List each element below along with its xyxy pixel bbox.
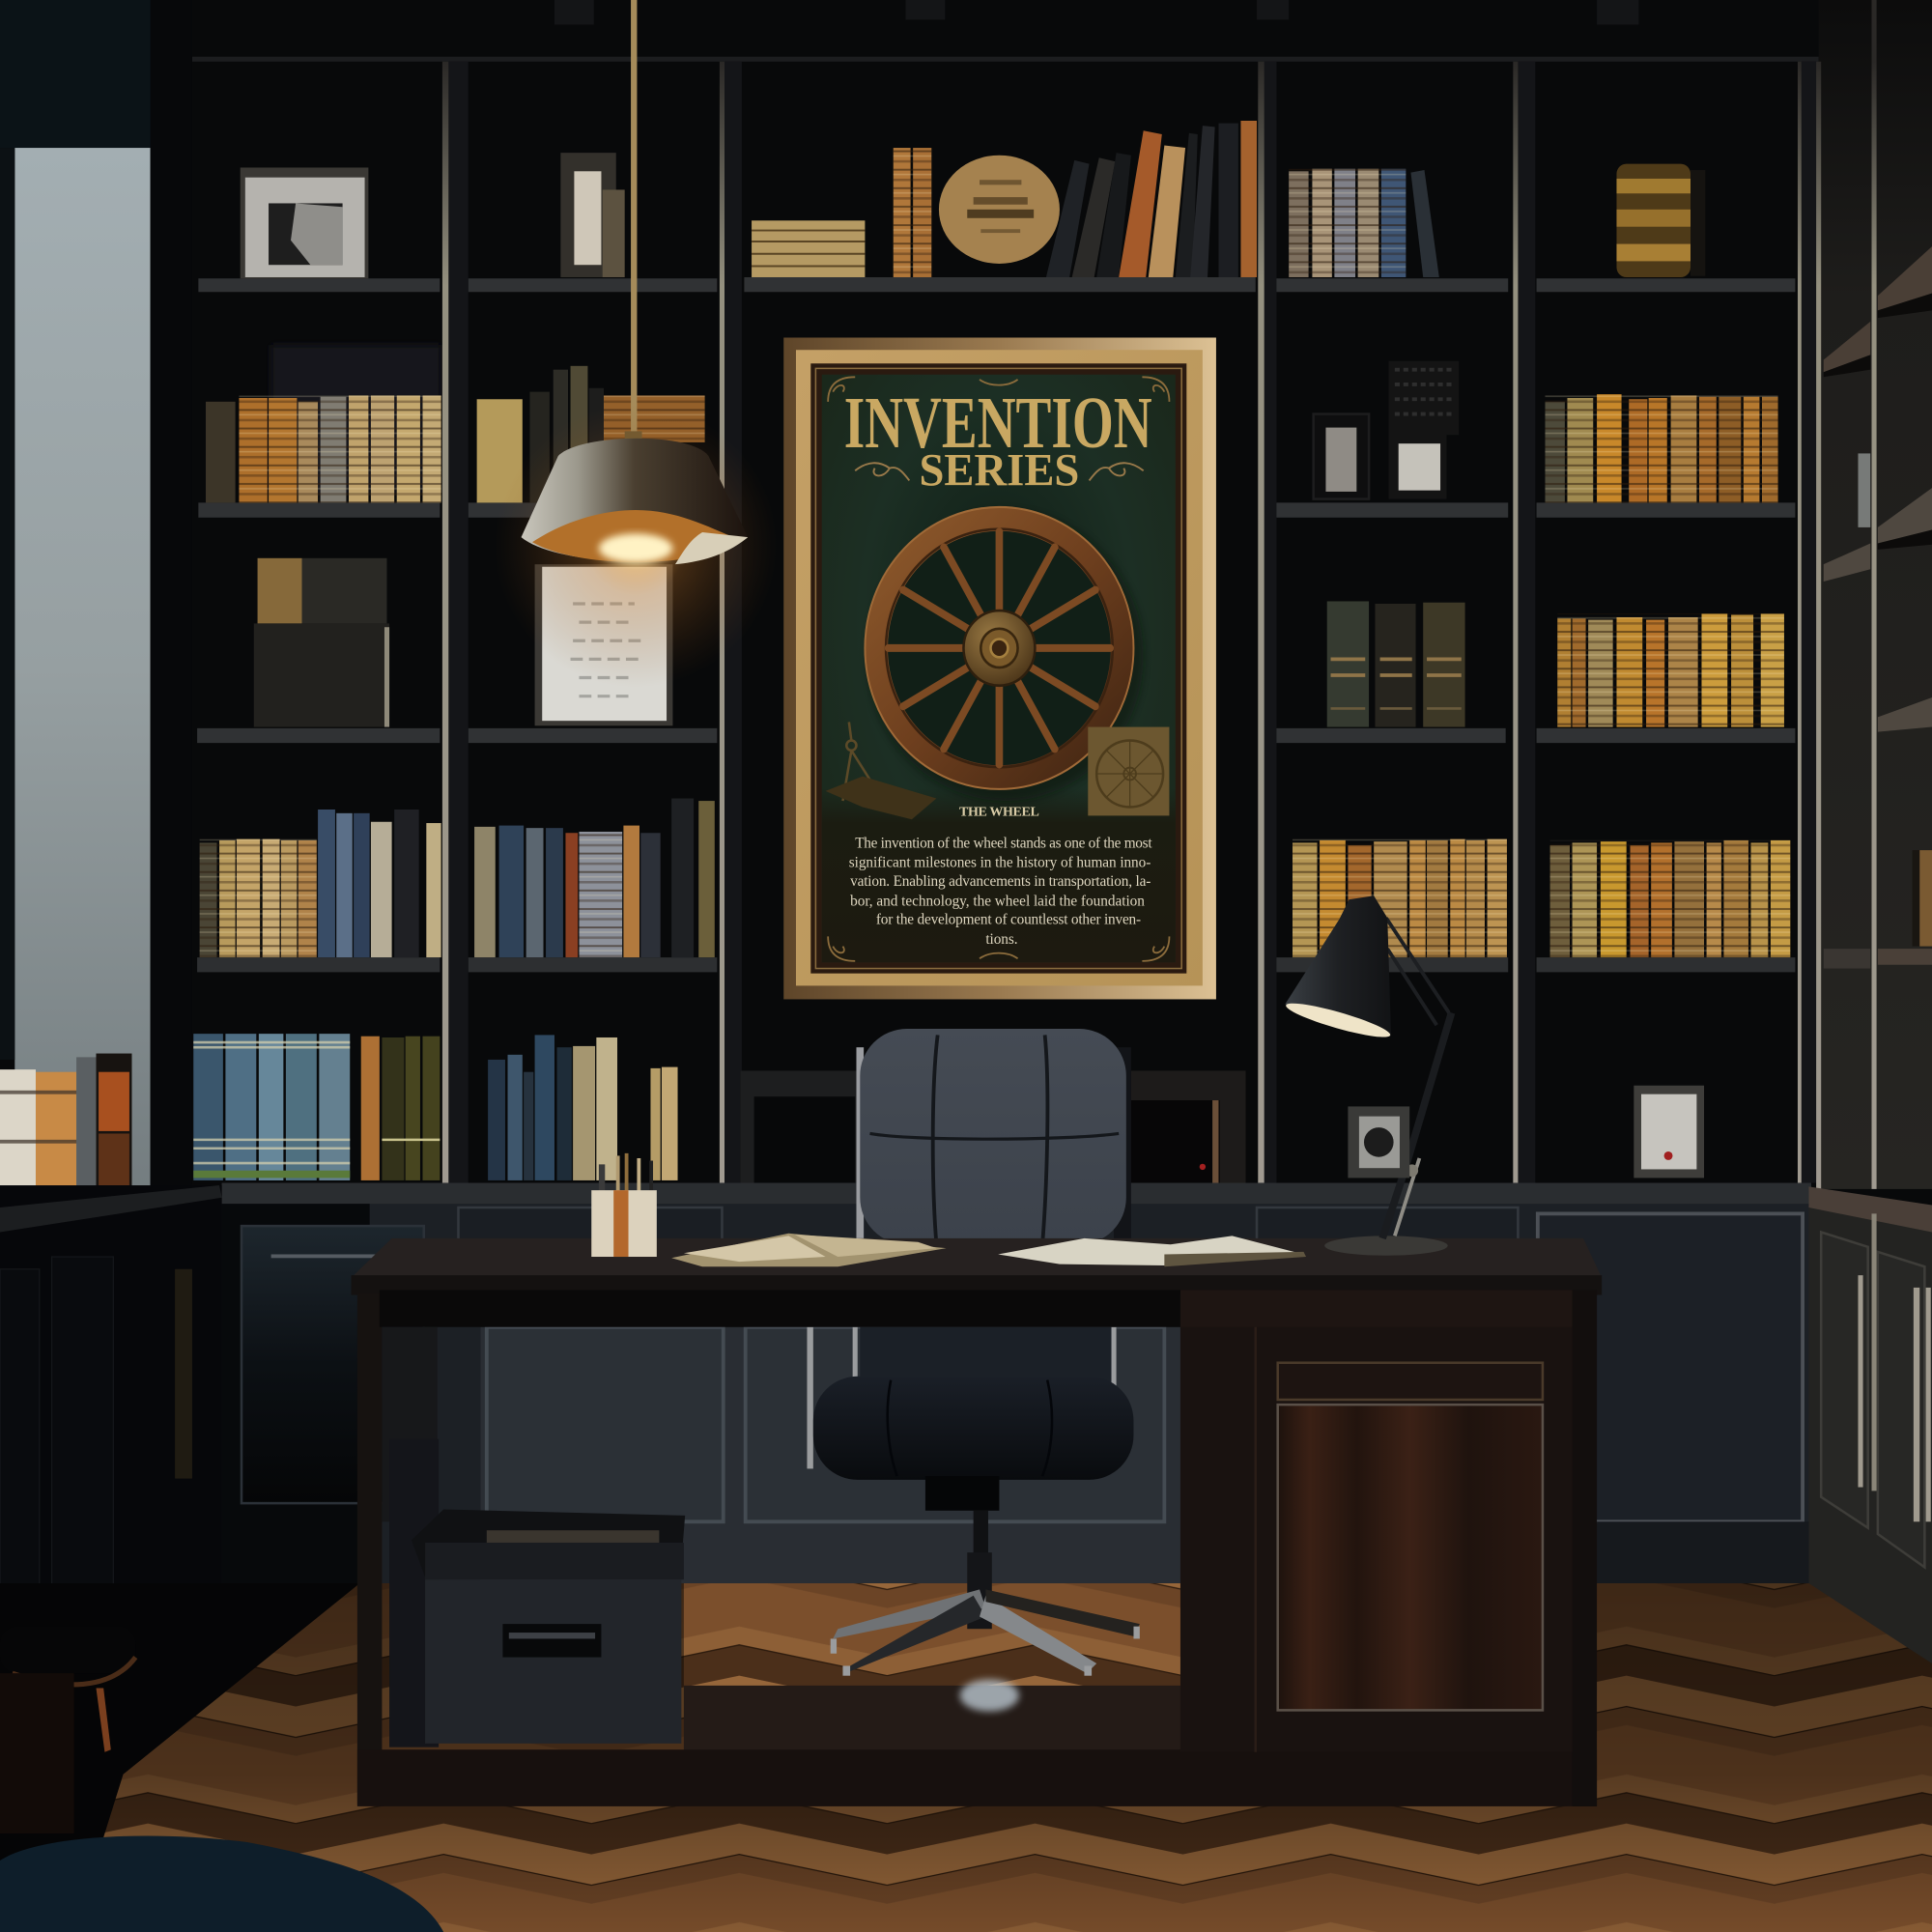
filing cabinet [382,1327,685,1747]
dark corner of floor [0,1583,359,1932]
framed paper under lamp [535,564,672,725]
desk pedestal [1180,1327,1575,1752]
books, top right [1289,169,1439,277]
title: Invention: INVENTION [844,382,1152,464]
gold canister [1616,164,1705,277]
dark cushion, bottom left [0,1836,443,1932]
open book, right [998,1236,1306,1266]
desk [352,1238,1602,1806]
small frame and beaded book [560,153,625,277]
books row 4, right [1293,839,1507,957]
books row 2, left [206,395,441,502]
desk modesty band [380,1290,1180,1327]
drawer front [1278,1363,1543,1400]
small frame, lower shelf right [1348,1106,1409,1178]
books row 2, right [1545,394,1778,502]
books row 5, left [193,1034,440,1180]
lower cabinets [222,1182,1811,1583]
right row 2 frames [1314,361,1459,499]
desk left leg [357,1293,382,1805]
books row 3, far right [1557,613,1784,727]
wheel [865,507,1144,801]
shelves row 4 [197,957,1795,972]
desk plinth [357,1749,1597,1806]
ceiling light fittings [554,0,1638,25]
cream mat [796,350,1203,985]
shelves row 1 [198,277,1795,292]
side frames behind chair [741,1070,1246,1182]
right wall cabinets [1808,1186,1932,1663]
chair back [856,1029,1131,1244]
drawer handle [502,1624,601,1658]
poster body text: The invention of the wheel stands as one of the most [855,836,1152,852]
glossy floor under desk [684,1686,1181,1750]
photo frame, top left [241,167,368,278]
stacked dark boxes [254,558,389,727]
books row 4, left [200,810,441,957]
poster body text: vation. Enabling advancements in transportation, la- [850,873,1151,890]
book stack, top centre [752,220,865,277]
chair lower back and seat [807,1327,1133,1511]
poster body text [849,836,1152,948]
open book, left [671,1234,947,1266]
bookcase structure [192,57,1819,1184]
books on window sill [0,1054,131,1195]
corner ornaments [828,377,1169,961]
poster body text: bor, and technology, the wheel laid the foundation [850,893,1145,909]
lit floor under desk [684,1583,1181,1687]
shelves row 2 [198,502,1795,518]
title: Series: SERIES [920,446,1079,497]
desk lamp [1284,895,1452,1256]
books row 3, right [1327,601,1465,727]
pedestal door [1278,1405,1543,1710]
right wall shelving [1816,0,1932,1189]
floor light reflection [960,1680,1019,1712]
compass [842,722,887,807]
plaque medallion [939,156,1060,264]
books row 2, middle [477,366,705,502]
poster body text: for the development of countlesst other inven- [876,912,1141,928]
shelves row 3 [197,728,1795,743]
poster body text: significant milestones in the history of human inno- [849,854,1151,870]
pencil holder [591,1153,657,1257]
chair base [831,1511,1140,1676]
poster body text: tions. [985,931,1018,948]
scroll [826,777,936,819]
stool, bottom left [0,1627,135,1833]
flourishes beside Series [855,463,1144,480]
framed poster [783,337,1216,999]
books row 5, middle [488,1035,678,1180]
lower text panel [822,788,1176,962]
books row 4, far right [1550,840,1790,957]
blueprint [1088,727,1169,815]
herringbone floor [0,1583,1932,1932]
wheel hub [963,611,1035,686]
certificate frame [1634,1086,1704,1178]
outer frame [783,337,1216,999]
books row 4, middle [474,799,715,957]
leaning books, top centre [1046,121,1257,277]
poster field [822,375,1176,962]
wheel spokes [889,531,1110,764]
books, upright pair [894,148,931,277]
left counter [0,1185,222,1629]
pendant lamp [494,0,778,688]
uprights [446,62,1819,1182]
poster border [810,363,1186,974]
window and left wall [0,0,192,1189]
desk top rail [1180,1290,1575,1329]
subtitle: THE WHEEL [959,804,1039,819]
